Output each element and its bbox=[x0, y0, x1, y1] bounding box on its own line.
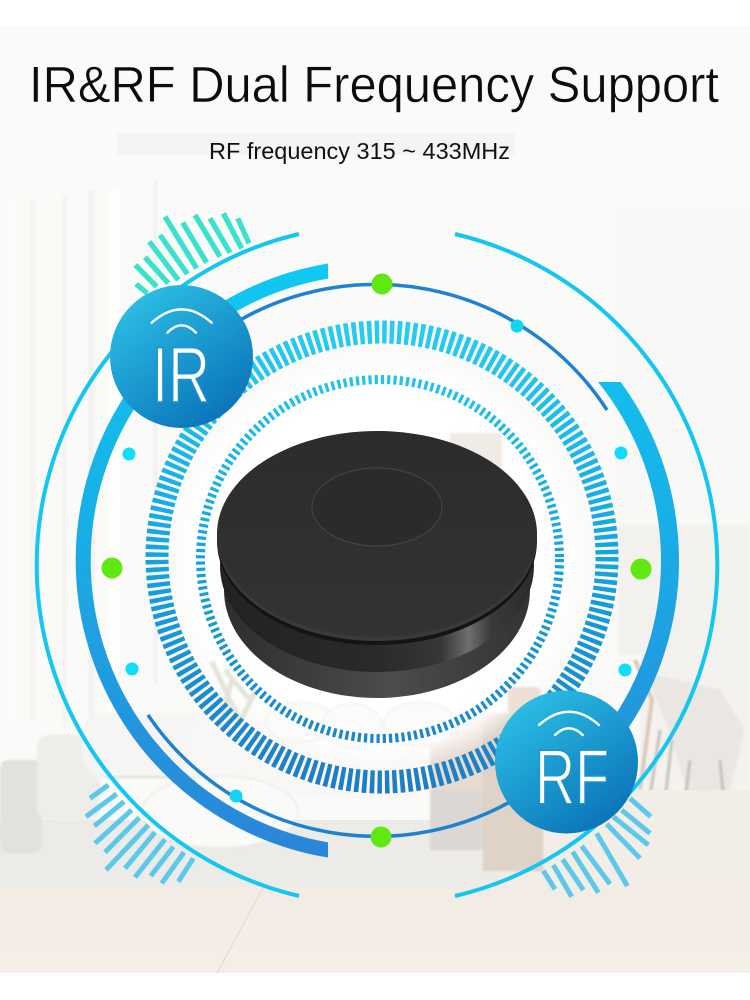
title: IR&RF Dual Frequency Support bbox=[29, 56, 719, 113]
RF badge: RF bbox=[535, 733, 609, 821]
fan of blue bars bottom-left bbox=[86, 785, 193, 883]
subtitle: RF frequency: RF frequency 315 ~ 433MHz bbox=[209, 138, 510, 164]
dots on the rings bbox=[102, 274, 652, 848]
device button bbox=[312, 468, 442, 546]
thick gradient arcs bbox=[83, 269, 670, 852]
fan of blue bars bottom-right bbox=[543, 798, 651, 897]
fan of teal bars top-left bbox=[135, 213, 249, 293]
IR badge bbox=[110, 285, 253, 428]
inner ring of ticks bbox=[200, 380, 560, 738]
room details visible near the device bbox=[212, 433, 541, 748]
white glow behind the device bbox=[166, 348, 590, 772]
outer thin cyan arcs bbox=[37, 234, 717, 896]
outer ring of ticks bbox=[157, 332, 607, 782]
IR badge: IR bbox=[152, 330, 210, 419]
thin blue arcs bbox=[148, 284, 607, 836]
RF badge bbox=[495, 690, 638, 834]
device: round black hub bbox=[217, 431, 537, 698]
